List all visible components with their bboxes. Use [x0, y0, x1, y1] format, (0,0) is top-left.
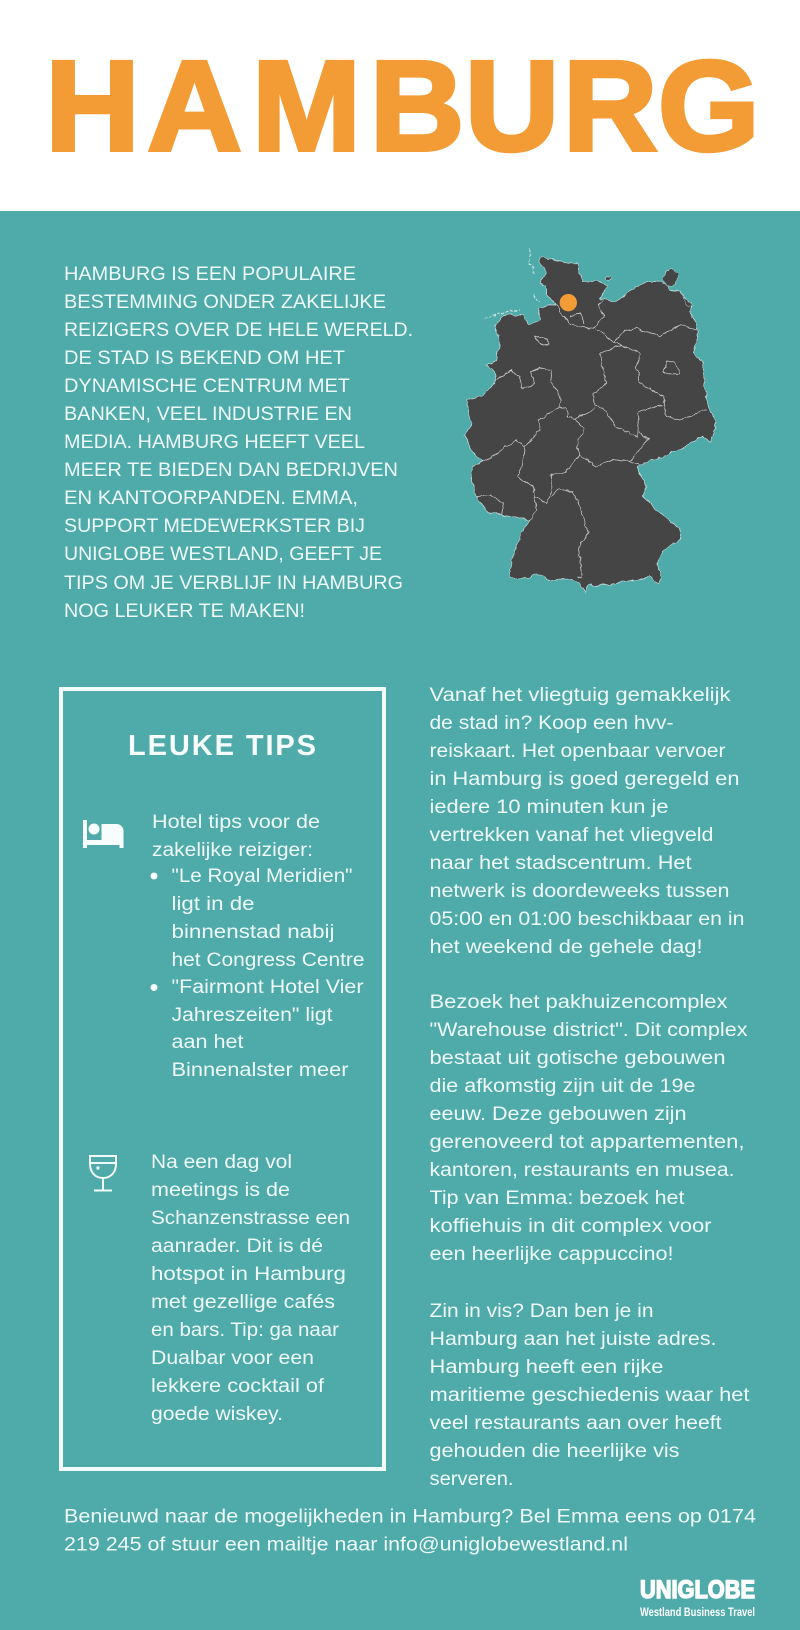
- cafe tips text: met gezellige cafés: [151, 1292, 335, 1313]
- map: Hamburg location marker: [560, 294, 577, 311]
- cafe tips text: Schanzenstrasse een: [151, 1208, 350, 1229]
- cafe tips text: meetings is de: [151, 1180, 290, 1201]
- intro text block: NOG LEUKER TE MAKEN!: [64, 601, 305, 622]
- right column: transport paragraph: netwerk is doordeweeks tussen: [430, 881, 730, 902]
- right column: transport paragraph: 05:00 en 01:00 beschikbaar en in: [430, 909, 744, 930]
- right column: warehouse paragraph: die afkomstig zijn uit de 19e: [430, 1076, 696, 1097]
- right column: warehouse paragraph: bestaat uit gotische gebouwen: [430, 1048, 726, 1069]
- right column: warehouse paragraph: Bezoek het pakhuizencomplex: [430, 992, 728, 1013]
- right column: fish paragraph: Zin in vis? Dan ben je in: [430, 1301, 654, 1322]
- hotel tips text: Hotel tips voor de: [152, 812, 320, 833]
- right column: fish paragraph: gehouden die heerlijke vis: [430, 1441, 680, 1462]
- right column: fish paragraph: Hamburg heeft een rijke: [430, 1357, 664, 1378]
- intro text block: DE STAD IS BEKEND OM HET: [64, 348, 345, 369]
- right column: fish paragraph: maritieme geschiedenis waar het: [430, 1385, 750, 1406]
- intro text block: MEER TE BIEDEN DAN BEDRIJVEN: [64, 460, 398, 481]
- right column: transport paragraph: reiskaart. Het openbaar vervoer: [430, 741, 726, 762]
- hotel tips text: ligt in de: [172, 894, 254, 915]
- right column: warehouse paragraph: eeuw. Deze gebouwen zijn: [430, 1104, 686, 1125]
- cafe tips text: en bars. Tip: ga naar: [151, 1320, 340, 1341]
- white header background: [0, 0, 800, 211]
- hotel tips text: "Le Royal Meridien": [172, 866, 352, 887]
- right column: warehouse paragraph: gerenoveerd tot appartementen,: [430, 1132, 744, 1153]
- right column: transport paragraph: iedere 10 minuten kun je: [430, 797, 668, 818]
- cafe tips text: Dualbar voor een: [151, 1348, 314, 1369]
- map of Germany: [465, 250, 715, 592]
- cafe tips text: hotspot in Hamburg: [151, 1264, 346, 1285]
- hotel tips text: het Congress Centre: [172, 950, 364, 971]
- icon: bed: [83, 820, 124, 848]
- hotel tips text: Binnenalster meer: [172, 1060, 349, 1081]
- intro text block: UNIGLOBE WESTLAND, GEEFT JE: [64, 544, 382, 565]
- right column: fish paragraph: [430, 1301, 750, 1490]
- intro text block: BESTEMMING ONDER ZAKELIJKE: [64, 292, 386, 313]
- right column: transport paragraph: het weekend de gehele dag!: [430, 937, 702, 958]
- logo: Uniglobe: [640, 1576, 755, 1619]
- right column: transport paragraph: [430, 685, 744, 958]
- intro text block: [64, 264, 413, 622]
- cafe tips text: Na een dag vol: [151, 1152, 292, 1173]
- intro text block: SUPPORT MEDEWERKSTER BIJ: [64, 516, 365, 537]
- right column: warehouse paragraph: Tip van Emma: bezoek het: [430, 1188, 685, 1209]
- hotel tips text: binnenstad nabij: [172, 922, 334, 943]
- intro text block: TIPS OM JE VERBLIJF IN HAMBURG: [64, 573, 403, 594]
- closing call to action: [64, 1506, 756, 1556]
- hotel tips text: aan het: [172, 1032, 244, 1053]
- cafe tips text: goede wiskey.: [151, 1404, 283, 1425]
- right column: warehouse paragraph: [430, 992, 748, 1265]
- intro text block: REIZIGERS OVER DE HELE WERELD.: [64, 320, 413, 341]
- right column: transport paragraph: de stad in? Koop een hvv-: [430, 713, 674, 734]
- right column: transport paragraph: vertrekken vanaf het vliegveld: [430, 825, 714, 846]
- intro text block: EN KANTOORPANDEN. EMMA,: [64, 488, 358, 509]
- icon: wine glass: [90, 1156, 116, 1190]
- intro text block: MEDIA. HAMBURG HEEFT VEEL: [64, 432, 365, 453]
- right column: warehouse paragraph: koffiehuis in dit complex voor: [430, 1216, 712, 1237]
- logo wordmark: UNIGLOBE: [640, 1576, 755, 1604]
- hotel tips text: [152, 812, 364, 1081]
- hotel tips text: zakelijke reiziger:: [152, 840, 313, 861]
- right column: warehouse paragraph: "Warehouse district". Dit complex: [430, 1020, 748, 1041]
- right column: transport paragraph: naar het stadscentrum. Het: [430, 853, 692, 874]
- panel heading: LEUKE TIPS: [128, 730, 316, 762]
- closing call to action: Benieuwd naar de mogelijkheden in Hamburg? Bel Emma eens op 0174: [64, 1506, 756, 1528]
- closing call to action: 219 245 of stuur een mailtje naar info@uniglobewestland.nl: [64, 1534, 628, 1556]
- right column: warehouse paragraph: kantoren, restaurants en musea.: [430, 1160, 734, 1181]
- title: HAMBURG: [45, 35, 760, 178]
- panel: leuke tips: [61, 689, 384, 1469]
- right column: fish paragraph: serveren.: [430, 1469, 514, 1490]
- panel border: [61, 689, 384, 1469]
- cafe tips text: lekkere cocktail of: [151, 1376, 325, 1397]
- map: landmass, islands and borders: [465, 250, 715, 592]
- logo tagline: Westland Business Travel: [640, 1607, 755, 1619]
- hotel tips text: "Fairmont Hotel Vier: [172, 977, 364, 998]
- intro text block: BANKEN, VEEL INDUSTRIE EN: [64, 404, 352, 425]
- right column: fish paragraph: veel restaurants aan over heeft: [430, 1413, 722, 1434]
- hotel tips text: Jahreszeiten" ligt: [172, 1005, 333, 1026]
- intro text block: DYNAMISCHE CENTRUM MET: [64, 376, 350, 397]
- cafe tips text: [151, 1152, 350, 1425]
- intro text block: HAMBURG IS EEN POPULAIRE: [64, 264, 356, 285]
- list bullets: [150, 872, 158, 991]
- right column: fish paragraph: Hamburg aan het juiste adres.: [430, 1329, 716, 1350]
- right column: warehouse paragraph: een heerlijke cappuccino!: [430, 1244, 674, 1265]
- right column: transport paragraph: Vanaf het vliegtuig gemakkelijk: [430, 685, 731, 706]
- right column: transport paragraph: in Hamburg is goed geregeld en: [430, 769, 740, 790]
- cafe tips text: aanrader. Dit is dé: [151, 1236, 323, 1257]
